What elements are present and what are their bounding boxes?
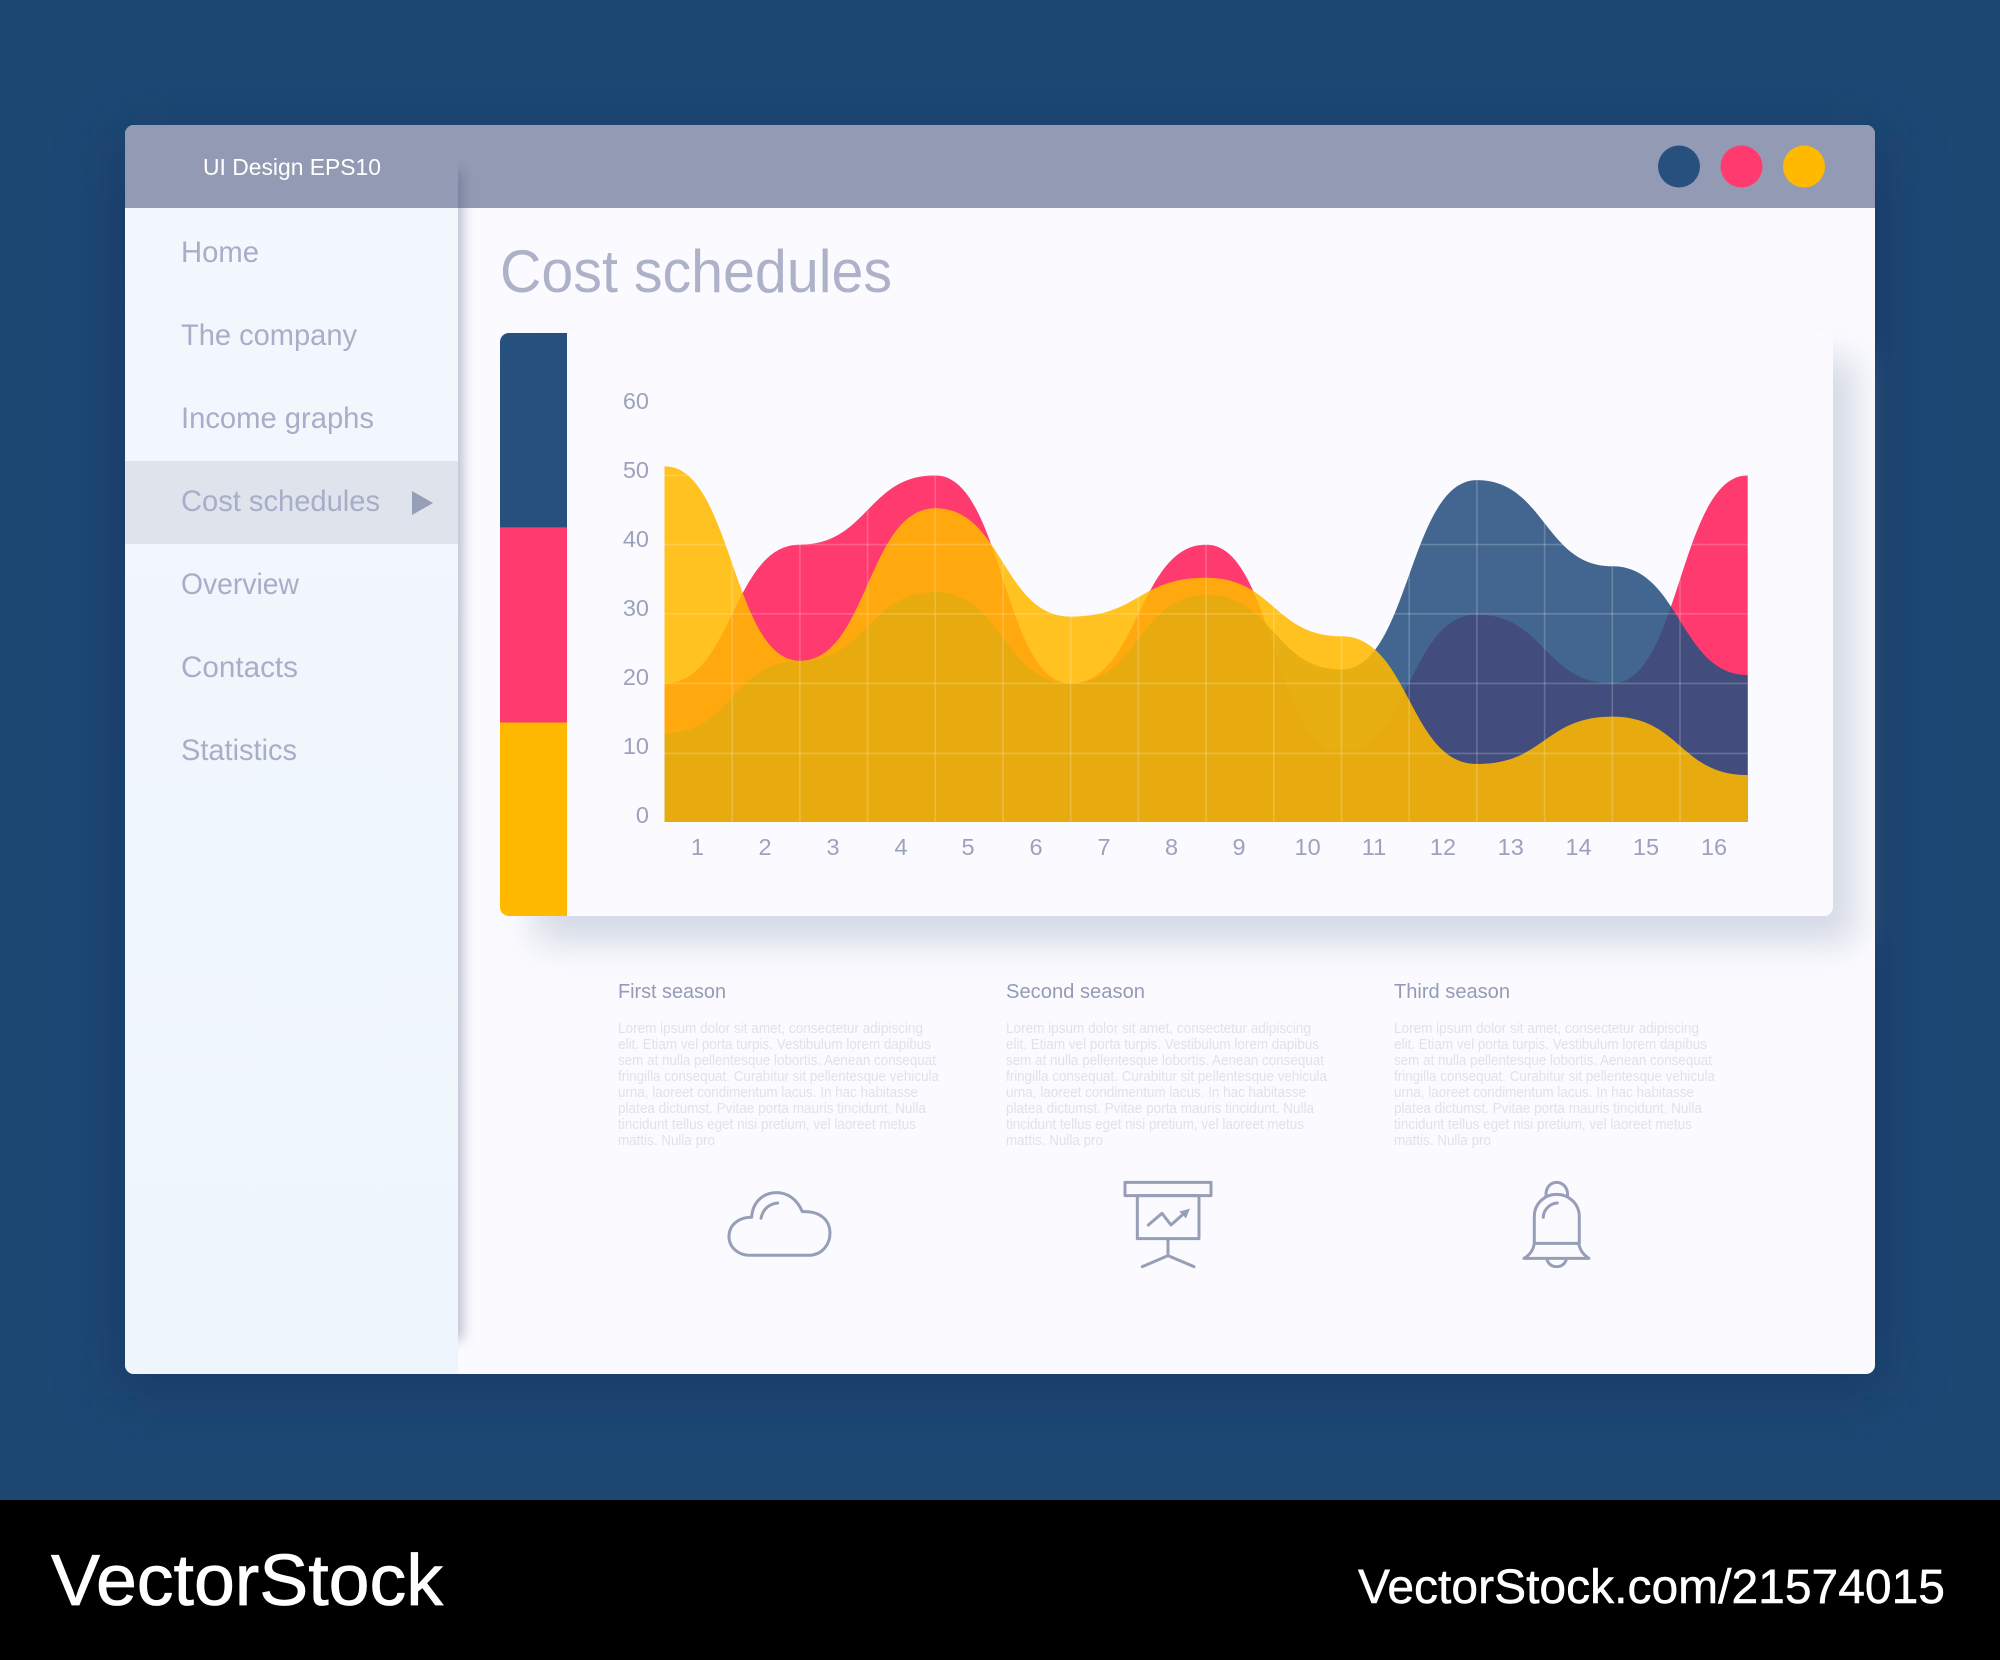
second season text block [1006,981,1327,1149]
x axis labels: 2 [758,834,772,860]
first season body: Lorem ipsum dolor sit amet, consectetur adipiscing [618,1021,923,1037]
x axis labels: 12 [1430,834,1456,860]
x axis labels: 16 [1701,834,1727,860]
second season body: urna, laoreet condimentum lacus. In hac habitasse [1006,1085,1306,1101]
y axis labels: 50 [623,457,649,483]
icon: presentation board [1125,1182,1211,1267]
third season body [1394,1021,1715,1149]
window title: UI Design EPS10 [203,154,381,180]
second season body [1006,1021,1327,1149]
first season body: tincidunt tellus eget nisi pretium, vel laoreet metus [618,1117,916,1133]
y axis labels: 10 [623,733,649,759]
second season body: tincidunt tellus eget nisi pretium, vel laoreet metus [1006,1117,1304,1133]
first season body: fringilla consequat. Curabitur sit pellentesque vehicula [618,1069,939,1085]
navigation menu [181,236,380,767]
first season body: urna, laoreet condimentum lacus. In hac habitasse [618,1085,918,1101]
second season body: elit. Etiam vel porta turpis. Vestibulum lorem dapibus [1006,1037,1319,1053]
first season body [618,1021,939,1149]
first season text block [618,981,939,1149]
second season body: Lorem ipsum dolor sit amet, consectetur adipiscing [1006,1021,1311,1037]
y axis labels: 20 [623,664,649,690]
x axis labels: 13 [1498,834,1524,860]
blue series [664,480,1748,822]
second season heading: Second season [1006,981,1145,1003]
x axis labels: 7 [1097,834,1111,860]
second season body: platea dictumst. Pvitae porta mauris tincidunt. Nulla [1006,1101,1314,1117]
y axis labels: 0 [636,802,649,828]
x axis labels: 6 [1029,834,1043,860]
footer url: VectorStock.com/21574015 [1358,1561,1945,1614]
second season body: sem at nulla pellentesque lobortis. Aenean consequat [1006,1053,1324,1069]
y axis labels: 60 [623,388,649,414]
icon: bell [1524,1182,1589,1267]
navigation menu: Home [181,236,259,269]
first season heading: First season [618,981,726,1003]
navigation menu: The company [181,319,357,352]
third season body: sem at nulla pellentesque lobortis. Aenean consequat [1394,1053,1712,1069]
navigation menu: Contacts [181,651,298,684]
chart card shadow [535,358,1855,943]
chart grid lines [664,470,1748,822]
x axis labels: 11 [1362,834,1386,860]
application window [125,125,1875,1374]
navigation menu: Cost schedules [181,485,380,518]
third season text block [1394,981,1715,1149]
x axis labels: 9 [1232,834,1246,860]
y axis labels [623,388,649,828]
x axis labels: 3 [826,834,840,860]
y axis labels: 30 [623,595,649,621]
page heading: Cost schedules [500,238,892,305]
icon: cloud [729,1193,830,1255]
third season heading: Third season [1394,981,1510,1003]
navigation menu: Statistics [181,734,297,767]
x axis labels [691,834,1727,860]
footer brand: VectorStock [51,1541,444,1621]
yellow series [664,466,1748,822]
area chart [664,466,1748,822]
third season body: fringilla consequat. Curabitur sit pellentesque vehicula [1394,1069,1715,1085]
first season body: sem at nulla pellentesque lobortis. Aenean consequat [618,1053,936,1069]
x axis labels: 15 [1633,834,1659,860]
legend bar [500,333,567,916]
x axis labels: 5 [961,834,975,860]
navigation menu: Overview [181,568,299,601]
second season body: fringilla consequat. Curabitur sit pellentesque vehicula [1006,1069,1327,1085]
window shadow [115,135,1885,1395]
x axis labels: 10 [1295,834,1321,860]
second season body: mattis. Nulla pro [1006,1133,1103,1149]
active navigation highlight [125,461,458,544]
y axis labels: 40 [623,526,649,552]
chart card [500,333,1833,916]
first season body: mattis. Nulla pro [618,1133,715,1149]
third season body: platea dictumst. Pvitae porta mauris tincidunt. Nulla [1394,1101,1702,1117]
navigation menu: Income graphs [181,402,374,435]
footer bar [0,1500,2000,1660]
x axis labels: 8 [1165,834,1178,860]
x axis labels: 4 [894,834,908,860]
icon: active item arrow [412,491,433,515]
third season body: urna, laoreet condimentum lacus. In hac habitasse [1394,1085,1694,1101]
header bar [125,125,1875,208]
first season body: platea dictumst. Pvitae porta mauris tincidunt. Nulla [618,1101,926,1117]
sidebar panel [125,208,458,1374]
third season body: elit. Etiam vel porta turpis. Vestibulum lorem dapibus [1394,1037,1707,1053]
third season body: Lorem ipsum dolor sit amet, consectetur adipiscing [1394,1021,1699,1037]
third season body: tincidunt tellus eget nisi pretium, vel laoreet metus [1394,1117,1692,1133]
window control dots [1658,146,1825,188]
x axis labels: 14 [1566,834,1592,860]
pink series [664,475,1748,822]
x axis labels: 1 [691,834,704,860]
first season body: elit. Etiam vel porta turpis. Vestibulum lorem dapibus [618,1037,931,1053]
third season body: mattis. Nulla pro [1394,1133,1491,1149]
